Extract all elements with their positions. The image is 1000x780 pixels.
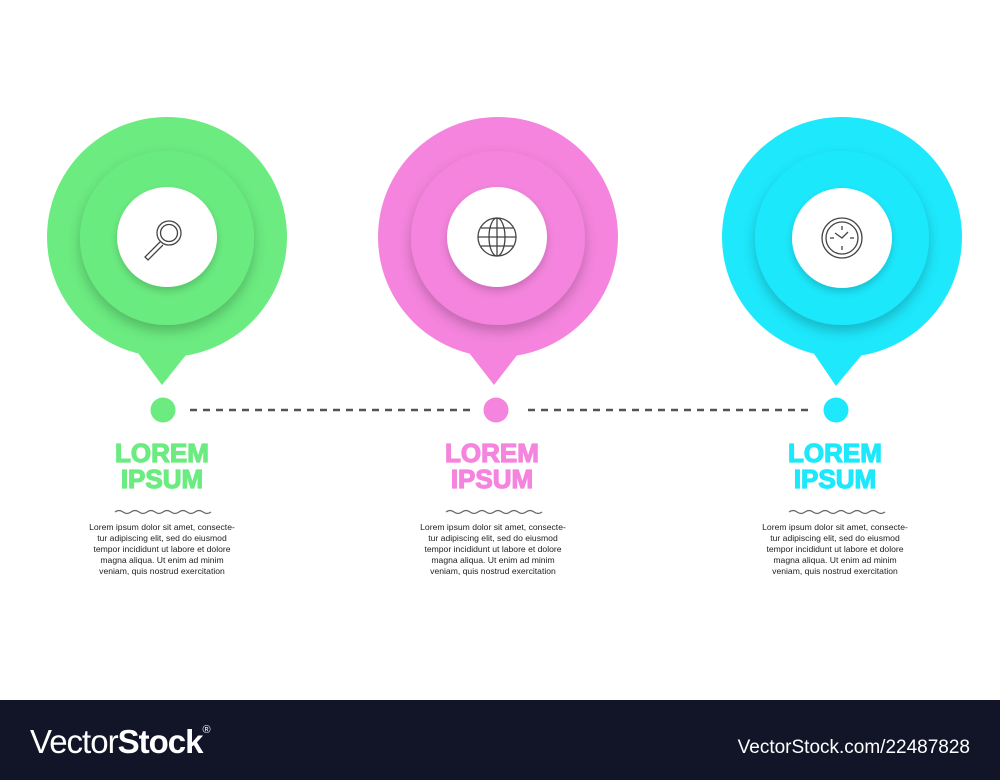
timeline dashed connector <box>190 409 812 411</box>
step 2 text: Lorem ipsum dolor sit amet, consecte- <box>420 522 566 532</box>
step 2 text <box>420 438 566 576</box>
step 3 text: Lorem ipsum dolor sit amet, consecte- <box>762 522 908 532</box>
step 2 text: tur adipiscing elit, sed do eiusmod <box>428 533 558 543</box>
step 3 text: veniam, quis nostrud exercitation <box>772 566 898 576</box>
step 1 text: LOREM <box>115 438 209 468</box>
footer bar <box>0 700 1000 780</box>
step 1 text <box>89 438 235 576</box>
step 1 text: tur adipiscing elit, sed do eiusmod <box>97 533 227 543</box>
step 1 text: magna aliqua. Ut enim ad minim <box>100 555 224 565</box>
pin: pink globe <box>378 117 618 385</box>
step 3 text: tur adipiscing elit, sed do eiusmod <box>770 533 900 543</box>
pin: cyan clock <box>722 117 962 386</box>
icon: globe <box>478 218 516 256</box>
step 3 text: tempor incididunt ut labore et dolore <box>766 544 904 554</box>
timeline dots <box>150 398 848 422</box>
step 3 text <box>762 438 908 576</box>
icon: magnifier <box>145 221 181 260</box>
step 2 text: tempor incididunt ut labore et dolore <box>424 544 562 554</box>
step 2 text: magna aliqua. Ut enim ad minim <box>431 555 555 565</box>
step 1 text: Lorem ipsum dolor sit amet, consecte- <box>89 522 235 532</box>
footer bar: VectorStock.com/22487828 <box>738 737 970 758</box>
step 2 text: LOREM <box>445 438 539 468</box>
footer bar: VectorStock <box>30 723 202 760</box>
step 1 text: IPSUM <box>121 464 203 494</box>
footer bar: ® <box>202 724 210 736</box>
step 1 text: veniam, quis nostrud exercitation <box>99 566 225 576</box>
step 3 text: IPSUM <box>794 464 876 494</box>
step 3 text: magna aliqua. Ut enim ad minim <box>773 555 897 565</box>
step 2 text: IPSUM <box>451 464 533 494</box>
step 1 text: tempor incididunt ut labore et dolore <box>93 544 231 554</box>
pin: green search <box>47 117 287 385</box>
step 3 text: LOREM <box>788 438 882 468</box>
step 2 text: veniam, quis nostrud exercitation <box>430 566 556 576</box>
icon: clock <box>822 218 862 258</box>
